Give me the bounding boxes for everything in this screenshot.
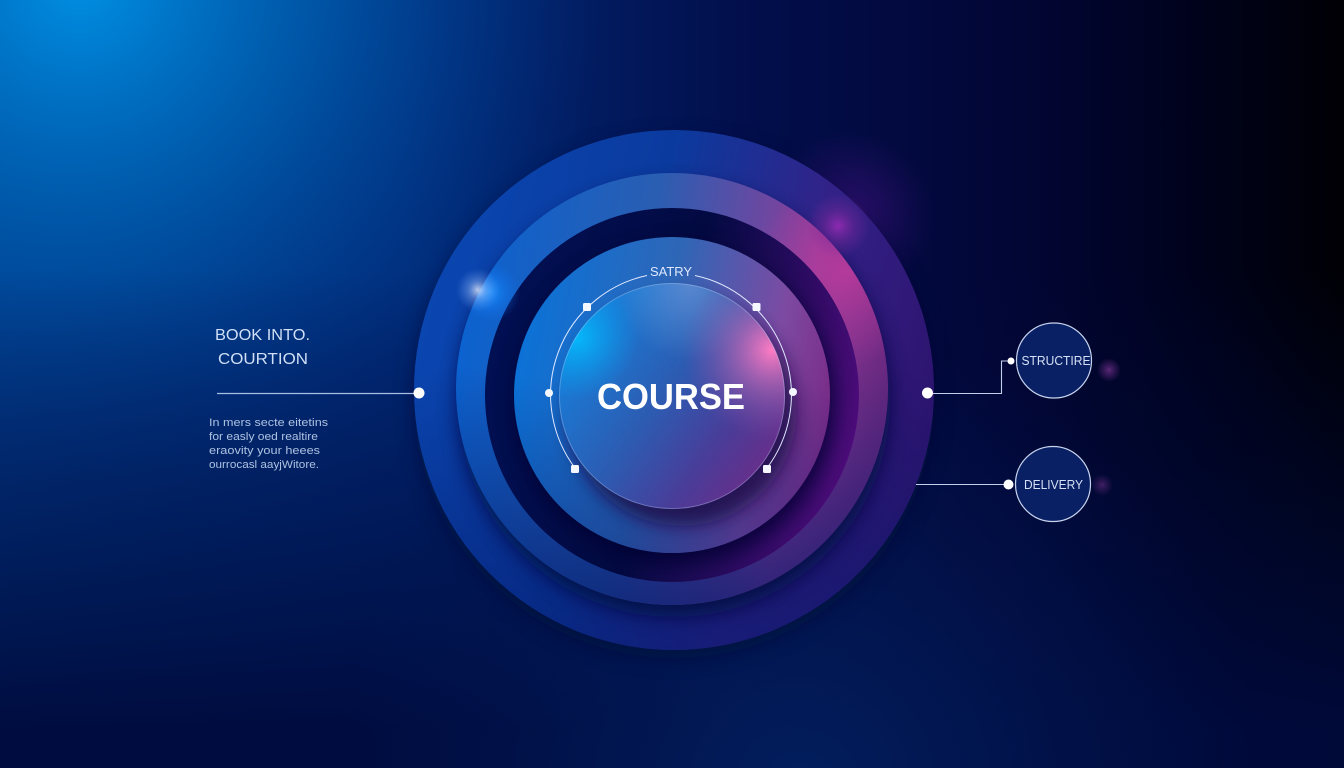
callout body text: ourrocasl aayjWitore. [209,459,319,471]
glow: blue [474,270,518,317]
structure circle: STRUCTIRE [1022,354,1090,368]
elbow connector [922,358,1014,398]
glow dot [1091,474,1113,496]
delivery circle [1016,446,1090,522]
second ring [456,173,890,617]
callout heading [215,327,310,368]
center disc [550,280,796,526]
glow: purple [806,194,870,258]
right node: structure [922,323,1121,398]
delivery circle: DELIVERY [1024,478,1084,492]
callout body text: In mers secte eitetins [209,417,329,429]
right node: delivery [916,446,1113,522]
center title: COURSE [597,376,745,417]
third disc [514,237,835,564]
connector [916,480,1014,490]
concentric course diagram [414,130,934,658]
arc label: SATRY [650,265,693,279]
connector line [217,388,424,398]
callout body text: for easly oed realtire [209,431,318,443]
glow: white [456,268,500,312]
thin arc with nodes [545,276,797,473]
callout body text [209,417,329,471]
callout body text: eraovity your heees [209,445,321,457]
callout heading: BOOK INTO. [215,327,310,344]
structure circle [1016,323,1092,398]
glow dot [1097,358,1121,382]
left callout [209,327,424,471]
callout heading: COURTION [218,351,308,368]
dark recessed ring [485,208,859,582]
outer ring [414,130,934,658]
